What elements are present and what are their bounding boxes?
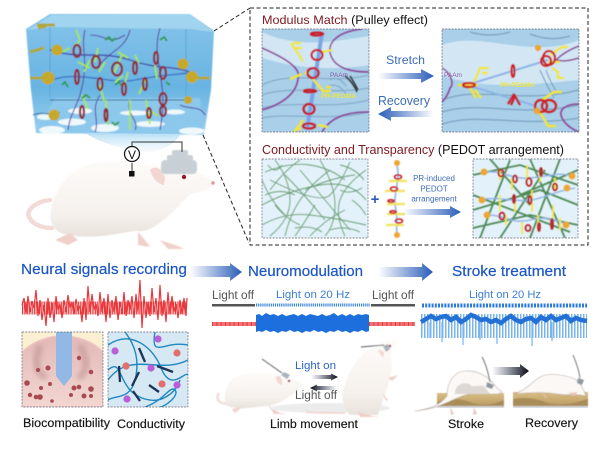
rat tail (28, 200, 52, 228)
panel: PEDOT fibres (262, 159, 368, 238)
panel: stretched network (442, 29, 579, 132)
shadow (270, 403, 390, 413)
panel: stretched network: PAAm (444, 72, 462, 79)
panel: unstretched network: PAAm (330, 72, 348, 79)
label: biocompatibility: Biocompatibility (23, 416, 111, 430)
light off bar left (212, 304, 255, 306)
left rat exploring (218, 359, 303, 414)
panel: stretched network: PR-PEGMA (500, 82, 535, 89)
light on label rats: Light on (295, 360, 336, 372)
red neural recording trace (22, 280, 187, 328)
panel: biocompatibility illustration (22, 332, 103, 407)
heading: neural signals recording: Neural signals recording (21, 261, 187, 278)
label: recovery: Recovery (525, 416, 579, 430)
recovery platform (513, 392, 588, 407)
light off bar right (371, 304, 415, 306)
right rat rearing (270, 340, 398, 417)
arrow back (310, 384, 337, 392)
panel: unstretched network: PR-PEGMA (321, 93, 356, 100)
implanted probe (56, 332, 72, 386)
recovery arrow (378, 107, 434, 121)
hydrogel cube illustration (26, 14, 214, 135)
light off label right: Light off (372, 290, 415, 302)
heading: stroke treatment: Stroke treatment (452, 263, 567, 280)
rat ear (150, 168, 165, 185)
optical fibre (262, 359, 282, 373)
rat feet (55, 232, 184, 249)
stroke light label: Light on 20 Hz (469, 289, 541, 301)
voltmeter wiring (132, 142, 182, 172)
dashed detail frame (250, 8, 588, 245)
arrangement arrow (403, 206, 461, 218)
body (225, 373, 303, 408)
heading: conductivity and transparency: Conductivity and Transparency (PEDOT arrangement) (262, 143, 564, 157)
stroke platform (437, 393, 504, 407)
label: limb movement: Limb movement (270, 417, 359, 431)
neuromodulation signal trace (212, 313, 415, 333)
panel: conductivity illustration (108, 332, 188, 407)
label: conductivity: Conductivity (117, 417, 186, 431)
stroke signal trace (421, 315, 587, 346)
neuromodulation light timeline (212, 304, 415, 306)
head implant (161, 150, 197, 174)
tail (306, 412, 345, 413)
plus sign: + (371, 191, 380, 208)
arrangement caption: PEDOT (420, 184, 448, 194)
light off label rats: Light off (295, 390, 338, 402)
arrow forward (311, 374, 338, 380)
label: stroke: Stroke (448, 417, 484, 431)
body (342, 340, 397, 415)
heading: neuromodulation: Neuromodulation (248, 263, 363, 280)
stretch label: Stretch (386, 53, 425, 67)
voltmeter symbol: V (128, 148, 136, 162)
stroke rat (415, 357, 502, 415)
arrangement caption: PR-induced (413, 174, 455, 183)
arrow to stroke treatment (378, 263, 433, 281)
main rat with implant (28, 142, 215, 249)
recovery rat (514, 355, 586, 398)
heading: modulus match: Modulus Match (Pulley effect) (262, 13, 428, 27)
arrow stroke to recovery (492, 364, 529, 378)
arrangement caption: arrangement (411, 194, 457, 204)
light on label: Light on 20 Hz (276, 289, 350, 301)
dashed zoom lines (203, 8, 250, 243)
tail (218, 393, 230, 403)
recovery label: Recovery (378, 94, 431, 108)
stretch arrow (378, 69, 434, 83)
voltmeter symbol (124, 146, 140, 176)
arrow to neuromodulation (190, 263, 242, 281)
rat body (50, 161, 214, 237)
light beam from cube to implant (85, 133, 180, 152)
light on dotted bar (256, 304, 370, 306)
rat eye (182, 175, 186, 179)
light off label left: Light off (212, 290, 255, 302)
panel: unstretched network (262, 29, 369, 134)
optical fibre (361, 345, 384, 347)
polyrotaxane chain (385, 160, 407, 238)
stroke light pulses (422, 304, 587, 308)
panel: arranged PEDOT (473, 159, 578, 238)
